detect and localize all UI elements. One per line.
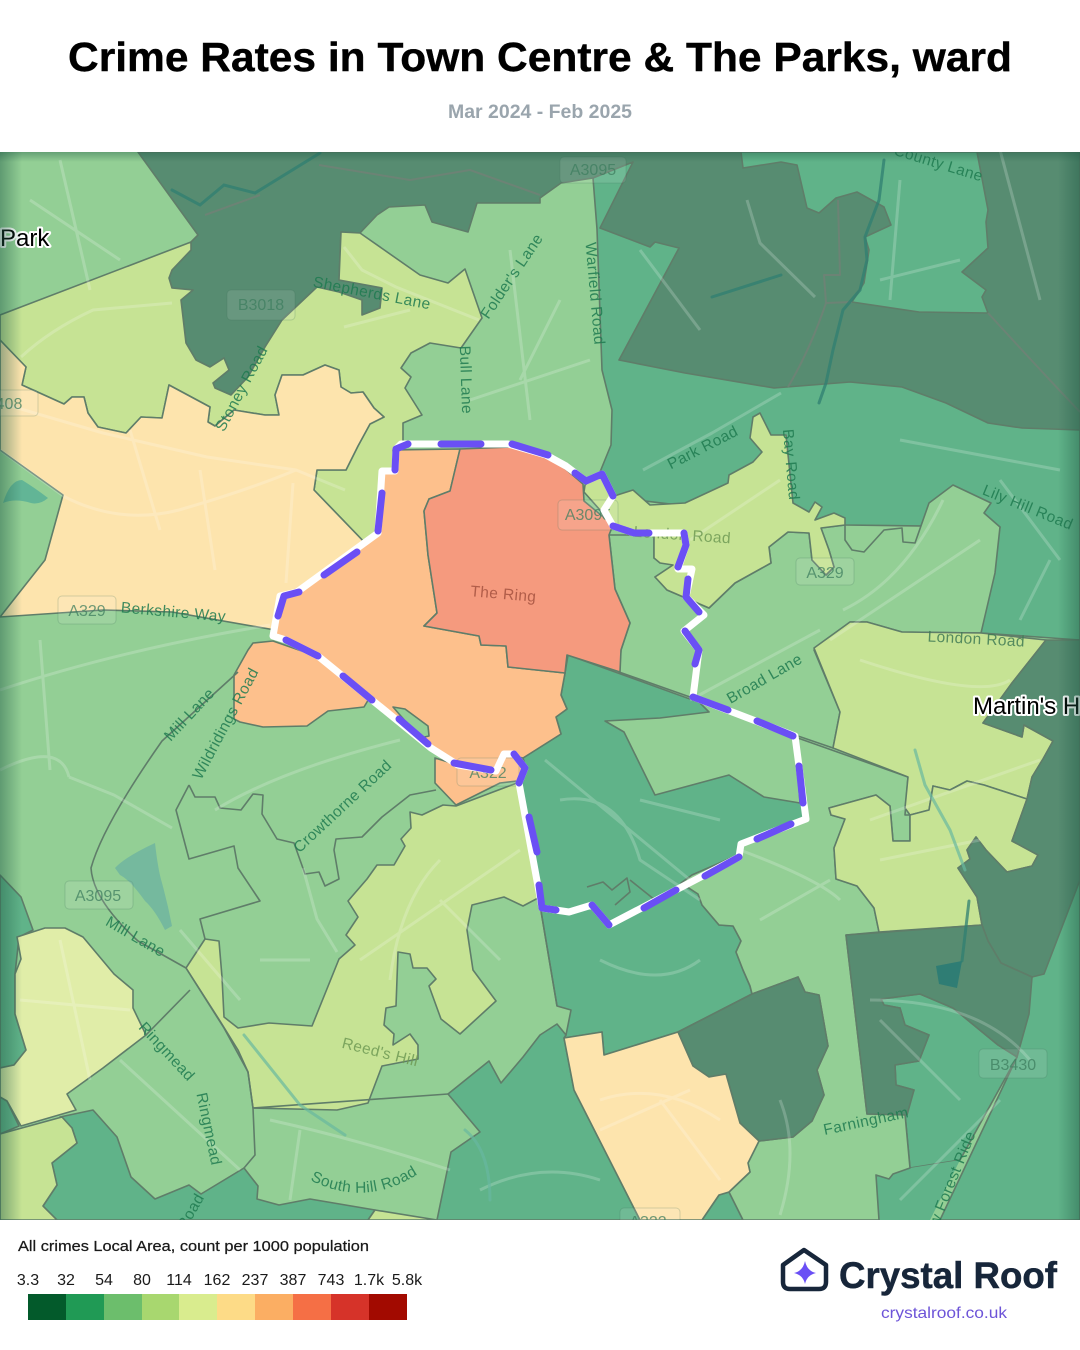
label: County Lane: County Lane — [892, 142, 985, 185]
label: Warfield Road: Warfield Road — [582, 242, 607, 346]
label: Reed's Hill: Reed's Hill — [340, 1035, 420, 1070]
zone: orange A322 — [435, 754, 525, 805]
water: south-east pond — [936, 961, 962, 988]
label: A3095 north: A3095 — [570, 162, 616, 179]
zone: south-east mid green — [681, 737, 910, 1220]
label: Stoney Road: Stoney Road — [212, 343, 272, 434]
label: road fragment bottom-left: Road — [174, 1191, 208, 1233]
label: Mill Lane south: Mill Lane — [103, 913, 168, 961]
title: Crime Rates in Town Centre & The Parks, ward — [68, 34, 1012, 80]
label: Berkshire Way: Berkshire Way — [120, 599, 227, 626]
label: A329 east: A329 — [806, 565, 844, 582]
label: A329 west: A329 — [68, 603, 106, 620]
label: Shepherds Lane: Shepherds Lane — [312, 274, 432, 313]
legend tick values: 3.3 — [17, 1272, 39, 1289]
zone: Reed's Hill yellow green — [186, 783, 540, 1110]
zone: cream south — [564, 1032, 759, 1220]
water: lake — [115, 843, 172, 930]
label: A329 east — [796, 558, 854, 585]
zone: darkest south blob — [678, 977, 828, 1141]
label: B3430: B3430 — [990, 1057, 1036, 1074]
zone: east yellow green — [829, 781, 1038, 932]
label: Park Road: Park Road — [665, 423, 741, 473]
label: B3018 — [227, 290, 295, 320]
zone: ward inner mid green — [605, 695, 800, 803]
icon: house outline — [783, 1250, 826, 1289]
zone: central dark green — [517, 655, 806, 1055]
label: B3018: B3018 — [238, 297, 284, 314]
zone: east edge dark green — [940, 880, 1080, 1220]
label: A3095 west: A3095 — [75, 888, 121, 905]
legend tick values: 32 — [57, 1272, 75, 1289]
zone: yellow green west and Shepherds Lane — [0, 232, 482, 546]
legend tick values: 162 — [204, 1272, 230, 1289]
label: A322 — [457, 758, 519, 786]
zone: cream west — [0, 340, 384, 630]
water: streams — [172, 153, 969, 961]
zone: far south-east dark green — [702, 1192, 743, 1220]
zone: red The Ring — [424, 447, 630, 673]
zone: south-east dark green — [881, 994, 1017, 1168]
label: The Ring: The Ring — [470, 583, 537, 606]
ward boundary dashed outline — [273, 444, 806, 925]
legend colour scale — [28, 1294, 407, 1320]
label: New Forest Ride: New Forest Ride — [918, 1129, 979, 1248]
label: A3095 north — [560, 157, 626, 183]
zone: small green sliver — [393, 707, 429, 738]
zone: bottom sliver — [368, 1210, 437, 1220]
zone: yellow green bottom-left — [0, 1117, 77, 1220]
logo: Crystal Roof — [783, 1250, 1058, 1322]
label: Wildridings Road: Wildridings Road — [190, 665, 263, 782]
label: A3095 central: A3095 — [565, 507, 611, 524]
label: A3095 west — [65, 881, 133, 909]
legend tick values: 5.8k — [392, 1272, 423, 1289]
label: Ringmead diagonal: Ringmead — [135, 1019, 198, 1085]
brand name: Crystal Roof — [839, 1255, 1058, 1296]
label: A408 — [0, 390, 38, 416]
zone: south dark green — [437, 1024, 640, 1220]
zone: orange town centre — [274, 449, 567, 771]
legend tick values: 80 — [133, 1272, 151, 1289]
label: Mill Lane north: Mill Lane — [161, 685, 218, 745]
label: B3430 — [979, 1049, 1047, 1078]
zone: west dark green — [0, 875, 33, 1068]
zone: Broad Lane mid green — [609, 485, 1000, 748]
water: west pond — [3, 480, 48, 503]
label: A322 south — [620, 1208, 680, 1238]
zone: pale yellow south-west — [0, 928, 146, 1126]
legend — [17, 1238, 423, 1320]
label: London Road: London Road — [633, 524, 732, 547]
zone: Martin's Heron yellow green — [814, 622, 1053, 815]
zone: darkest Martin's Heron east — [958, 640, 1080, 977]
label: Bull Lane: Bull Lane — [456, 345, 475, 414]
zone: south-west dark green — [43, 1110, 375, 1220]
legend tick values: 1.7k — [354, 1272, 385, 1289]
zone: orange Wildridings — [234, 641, 370, 727]
label: Lily Hill Road: Lily Hill Road — [980, 482, 1075, 534]
map edge vignette — [0, 152, 1080, 1220]
zone: London Road yellow green — [584, 413, 845, 608]
label: A322: A322 — [469, 765, 507, 782]
label: A322 south: A322 — [629, 1214, 667, 1231]
label: Crowthorne Road: Crowthorne Road — [291, 757, 395, 856]
legend tick values — [17, 1272, 423, 1289]
label: A329 west — [58, 596, 116, 624]
label: A3095 central — [558, 500, 618, 530]
label: Farningham: Farningham — [822, 1104, 910, 1139]
subtitle: date range: Mar 2024 - Feb 2025 — [448, 102, 632, 123]
road network — [0, 150, 1060, 1215]
legend tick values: 387 — [280, 1272, 306, 1289]
label: Ringmead vertical: Ringmead — [192, 1091, 224, 1167]
zone: darkest south-east — [846, 925, 1032, 1115]
label: South Hill Road: South Hill Road — [312, 1165, 417, 1193]
website: crystalroof.co.uk — [881, 1305, 1008, 1322]
label: Broad Lane: Broad Lane — [724, 651, 805, 708]
zone: darkest north — [138, 152, 1080, 430]
label: Folder's Lane: Folder's Lane — [478, 231, 547, 322]
legend title: All crimes Local Area, count per 1000 population — [18, 1238, 369, 1255]
internal boundary lines — [91, 672, 655, 1168]
legend tick values: 743 — [318, 1272, 344, 1289]
label: Bay Road: Bay Road — [779, 428, 802, 501]
label: Park place name: Park — [0, 225, 50, 252]
legend tick values: 54 — [95, 1272, 113, 1289]
label: London Road east: London Road — [927, 628, 1025, 651]
icon: four-point star — [794, 1261, 816, 1284]
legend tick values: 237 — [242, 1272, 268, 1289]
zone: north-east dark green — [593, 152, 1080, 640]
legend tick values: 114 — [166, 1272, 192, 1289]
